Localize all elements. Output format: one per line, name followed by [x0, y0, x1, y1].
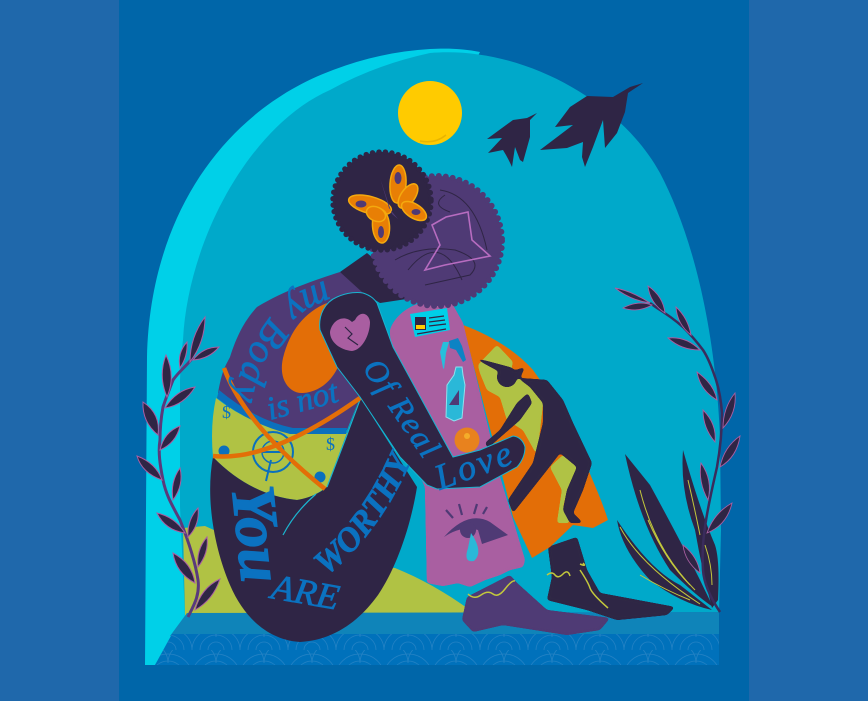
lime waist wrap — [212, 398, 347, 500]
right boot — [547, 537, 675, 620]
arch: light cyan wall — [145, 49, 480, 665]
dollars and target on wrap — [218, 402, 335, 482]
text: Of Real: Of Real — [366, 362, 442, 458]
orange gap between arm and torso — [282, 303, 338, 393]
neck — [340, 253, 420, 303]
dollars and target on wrap: $ — [222, 402, 231, 422]
dark arm — [320, 292, 525, 489]
sun — [398, 81, 462, 145]
floor band — [170, 612, 719, 636]
text: You: You — [218, 482, 296, 585]
orange rope — [213, 368, 360, 489]
text: ARE: ARE — [267, 566, 343, 618]
text: is not: is not — [263, 374, 343, 428]
central blue panel — [119, 0, 749, 701]
small bird — [487, 113, 537, 167]
dark hair — [333, 152, 431, 250]
purple hair — [372, 176, 502, 306]
blue waist band — [217, 390, 347, 434]
ID card — [410, 308, 450, 337]
orange fruit — [454, 428, 480, 452]
butterfly — [347, 164, 430, 244]
text: my Body: my Body — [228, 280, 330, 404]
orange skirt — [463, 325, 608, 558]
large bird — [540, 83, 643, 167]
pink dress — [390, 300, 525, 587]
tiled floor — [155, 634, 719, 665]
left boot — [462, 575, 610, 635]
text: WORTHY: WORTHY — [313, 448, 410, 572]
water bottle — [446, 367, 465, 421]
lime skirt pattern — [478, 345, 577, 523]
arch: teal interior — [180, 52, 721, 617]
cyan leg contour lines — [283, 397, 361, 535]
right plant — [615, 286, 740, 612]
text: Love: Love — [428, 432, 520, 498]
agave plant — [617, 450, 719, 610]
dollars and target on wrap: $ — [326, 434, 335, 454]
left plant — [137, 317, 220, 617]
small dancing figure — [472, 357, 592, 523]
broken heart — [330, 314, 370, 351]
keys — [440, 338, 466, 369]
large dark leg — [210, 397, 417, 642]
lime ground hill — [183, 526, 480, 616]
eye with tear — [444, 504, 508, 561]
purple torso — [218, 272, 380, 432]
